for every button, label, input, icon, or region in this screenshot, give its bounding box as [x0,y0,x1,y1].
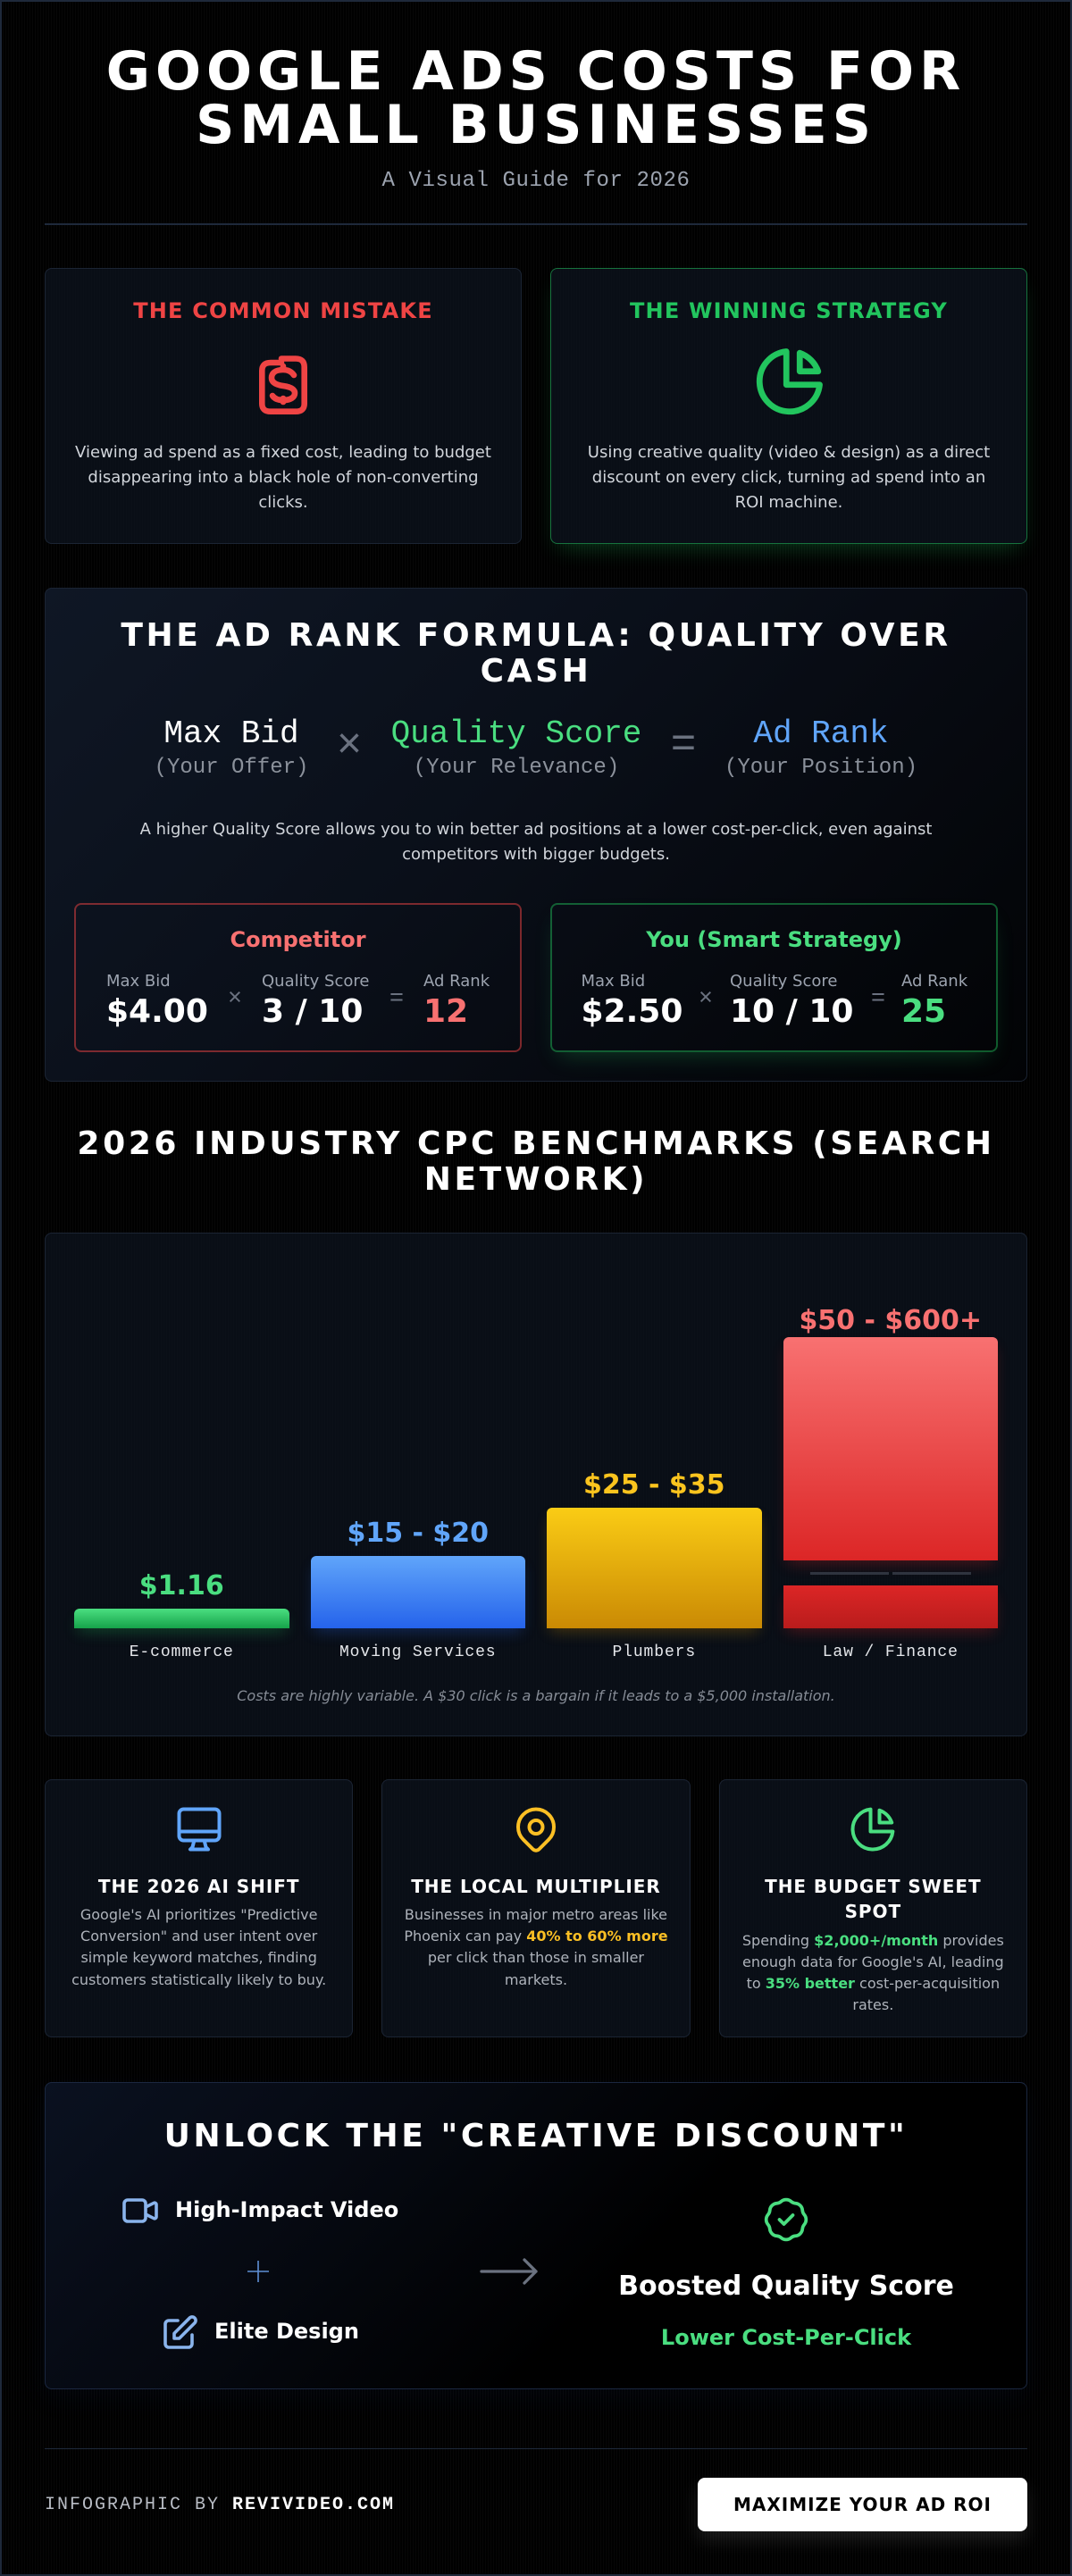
chart note: Costs are highly variable. A $30 click is a bargain if it leads to a $5,000 installation. [237,1687,835,1704]
quality score [262,972,369,1030]
ad rank: 25 [901,993,946,1030]
panel: the budget sweet spot [719,1779,1027,2037]
bar: e-commerce [73,1570,290,1661]
quality score: Quality Score [262,972,369,991]
heading: THE 2026 AI SHIFT [98,1876,299,1897]
header: title and subtitle [106,40,966,193]
example: competitor [74,903,522,1052]
competitor heading: Competitor [230,927,366,952]
text: to 35% better cost-per-acquisition [747,1975,1000,1992]
bar: law and finance (broken axis) [780,1305,1001,1661]
icon: plus [247,2261,269,2282]
description: disappearing into a black hole of non-converting [88,468,479,487]
text: simple keyword matches, finding [80,1949,317,1966]
panel: the local multiplier [381,1779,691,2037]
subtitle: A Visual Guide for 2026 [381,169,691,193]
equals: = [871,986,885,1013]
description: Using creative quality (video & design) as a direct [588,443,990,462]
heading: the winning strategy: THE WINNING STRATEGY [630,298,948,323]
icon: map pin [516,1808,556,1853]
description [75,443,491,512]
panel: cpc bar chart [45,1233,1027,1736]
heading: THE BUDGET SWEET [765,1876,982,1897]
heading: industry benchmarks: NETWORK) [424,1161,648,1198]
icon: pie chart [756,348,823,414]
text: customers statistically likely to buy. [71,1971,326,1988]
description: ROI machine. [735,493,842,512]
example: you [550,903,998,1052]
text: Google's AI prioritizes "Predictive [80,1906,317,1923]
panel: ad rank formula [45,588,1027,1082]
text [71,1906,326,1988]
ad rank [423,972,490,1030]
operator: times: × [337,723,362,771]
category: Law / Finance [823,1643,959,1661]
text: Phoenix can pay 40% to 60% more [404,1928,668,1945]
max bid [106,972,208,1030]
text [742,1931,1004,2013]
term: quality score [391,715,641,780]
description: clicks. [258,493,308,512]
result: boosted quality score: Boosted Quality Score [618,2271,954,2302]
call-to-action button [698,2478,1027,2531]
category: Moving Services [339,1643,497,1661]
term: ad rank: Ad Rank [753,715,889,752]
quality score: Quality Score [730,972,837,991]
panel: the winning strategy [550,268,1027,544]
value: $50 - $600+ [799,1305,982,1336]
heading: industry benchmarks [77,1125,995,1198]
heading: the common mistake: THE COMMON MISTAKE [133,298,433,323]
bar shape [74,1609,289,1628]
quality score: 10 / 10 [730,993,853,1030]
text: markets. [505,1971,567,1988]
result: lower cost-per-click: Lower Cost-Per-Click [661,2325,911,2350]
text: Spending $2,000+/month provides [742,1931,1004,1949]
max bid: $2.50 [581,993,683,1030]
panel: the common mistake [45,268,522,544]
quality score: 3 / 10 [262,993,363,1030]
explanation text: competitors with bigger budgets. [402,845,670,864]
heading: UNLOCK THE "CREATIVE DISCOUNT" [164,2118,908,2154]
quality score [730,972,853,1030]
max bid: Max Bid [106,972,171,991]
description [588,443,990,512]
label: elite design: Elite Design [214,2319,359,2344]
heading: THE LOCAL MULTIPLIER [411,1876,661,1897]
times: × [228,986,242,1013]
term: max bid: Max Bid [163,715,299,752]
icon: pencil edit [163,2315,197,2349]
value: $1.16 [139,1570,224,1602]
term: ad rank [724,715,917,780]
equals: = [389,986,404,1013]
you heading: You (Smart Strategy) [646,927,902,952]
term: quality score: (Your Relevance) [414,756,619,780]
term: quality score: Quality Score [391,715,641,752]
bar shape [311,1556,525,1628]
icon: video camera [122,2198,158,2223]
explanation text [139,820,932,864]
category: Plumbers [612,1643,696,1661]
text: rates. [852,1996,893,2013]
formula [155,715,917,780]
title: GOOGLE ADS COSTS FOR [106,40,966,103]
bar upper segment [783,1337,998,1560]
icon: monitor [177,1808,222,1851]
text: Conversion" and user intent over [80,1928,317,1945]
explanation text: A higher Quality Score allows you to win better ad positions at a lower cost-per-click, even against [140,820,932,839]
title: SMALL BUSINESSES [196,94,876,156]
heading: ad rank formula: THE AD RANK FORMULA: QUALITY OVER [121,617,951,654]
heading: ad rank formula [121,617,951,690]
ad rank: Ad Rank [423,972,490,991]
ad rank [901,972,967,1030]
text: Businesses in major metro areas like [405,1906,667,1923]
panel: creative discount [45,2082,1027,2389]
bar lower segment [783,1585,998,1628]
icon: dollar receipt [259,355,307,414]
times: × [699,986,713,1013]
heading: SPOT [845,1901,901,1922]
text: enough data for Google's AI, leading [742,1953,1004,1970]
term: max bid: (Your Offer) [155,756,308,780]
value: $25 - $35 [583,1468,725,1501]
heading: ad rank formula: CASH [481,653,591,690]
description: discount on every click, turning ad spend into an [592,468,985,487]
label: high-impact video: High-Impact Video [175,2197,398,2222]
term: max bid [155,715,308,780]
ad rank: Ad Rank [901,972,967,991]
term: ad rank: (Your Position) [724,756,917,780]
description: Viewing ad spend as a fixed cost, leading to budget [75,443,491,462]
icon: pie chart [850,1808,895,1851]
ad rank: 12 [423,993,468,1030]
panel: the 2026 ai shift [45,1779,353,2037]
bar: moving services [307,1518,529,1661]
bar: plumbers [543,1468,766,1661]
bar shape [547,1508,761,1628]
max bid [581,972,683,1030]
heading: industry benchmarks: 2026 INDUSTRY CPC BENCHMARKS (SEARCH [77,1125,995,1162]
max bid: $4.00 [106,993,208,1030]
footer credit: INFOGRAPHIC BY REVIVIDEO.COM [45,2495,395,2515]
title [106,40,966,156]
icon: badge check [765,2197,808,2242]
category: E-commerce [130,1643,234,1661]
call-to-action button: MAXIMIZE YOUR AD ROI [733,2494,992,2515]
operator: equals: = [671,722,696,770]
value: $15 - $20 [347,1518,489,1549]
axis break marker [810,1572,971,1574]
heading [765,1876,982,1922]
arrow [480,2258,538,2285]
max bid: Max Bid [581,972,645,991]
text [404,1906,668,1988]
text: per click than those in smaller [428,1949,644,1966]
